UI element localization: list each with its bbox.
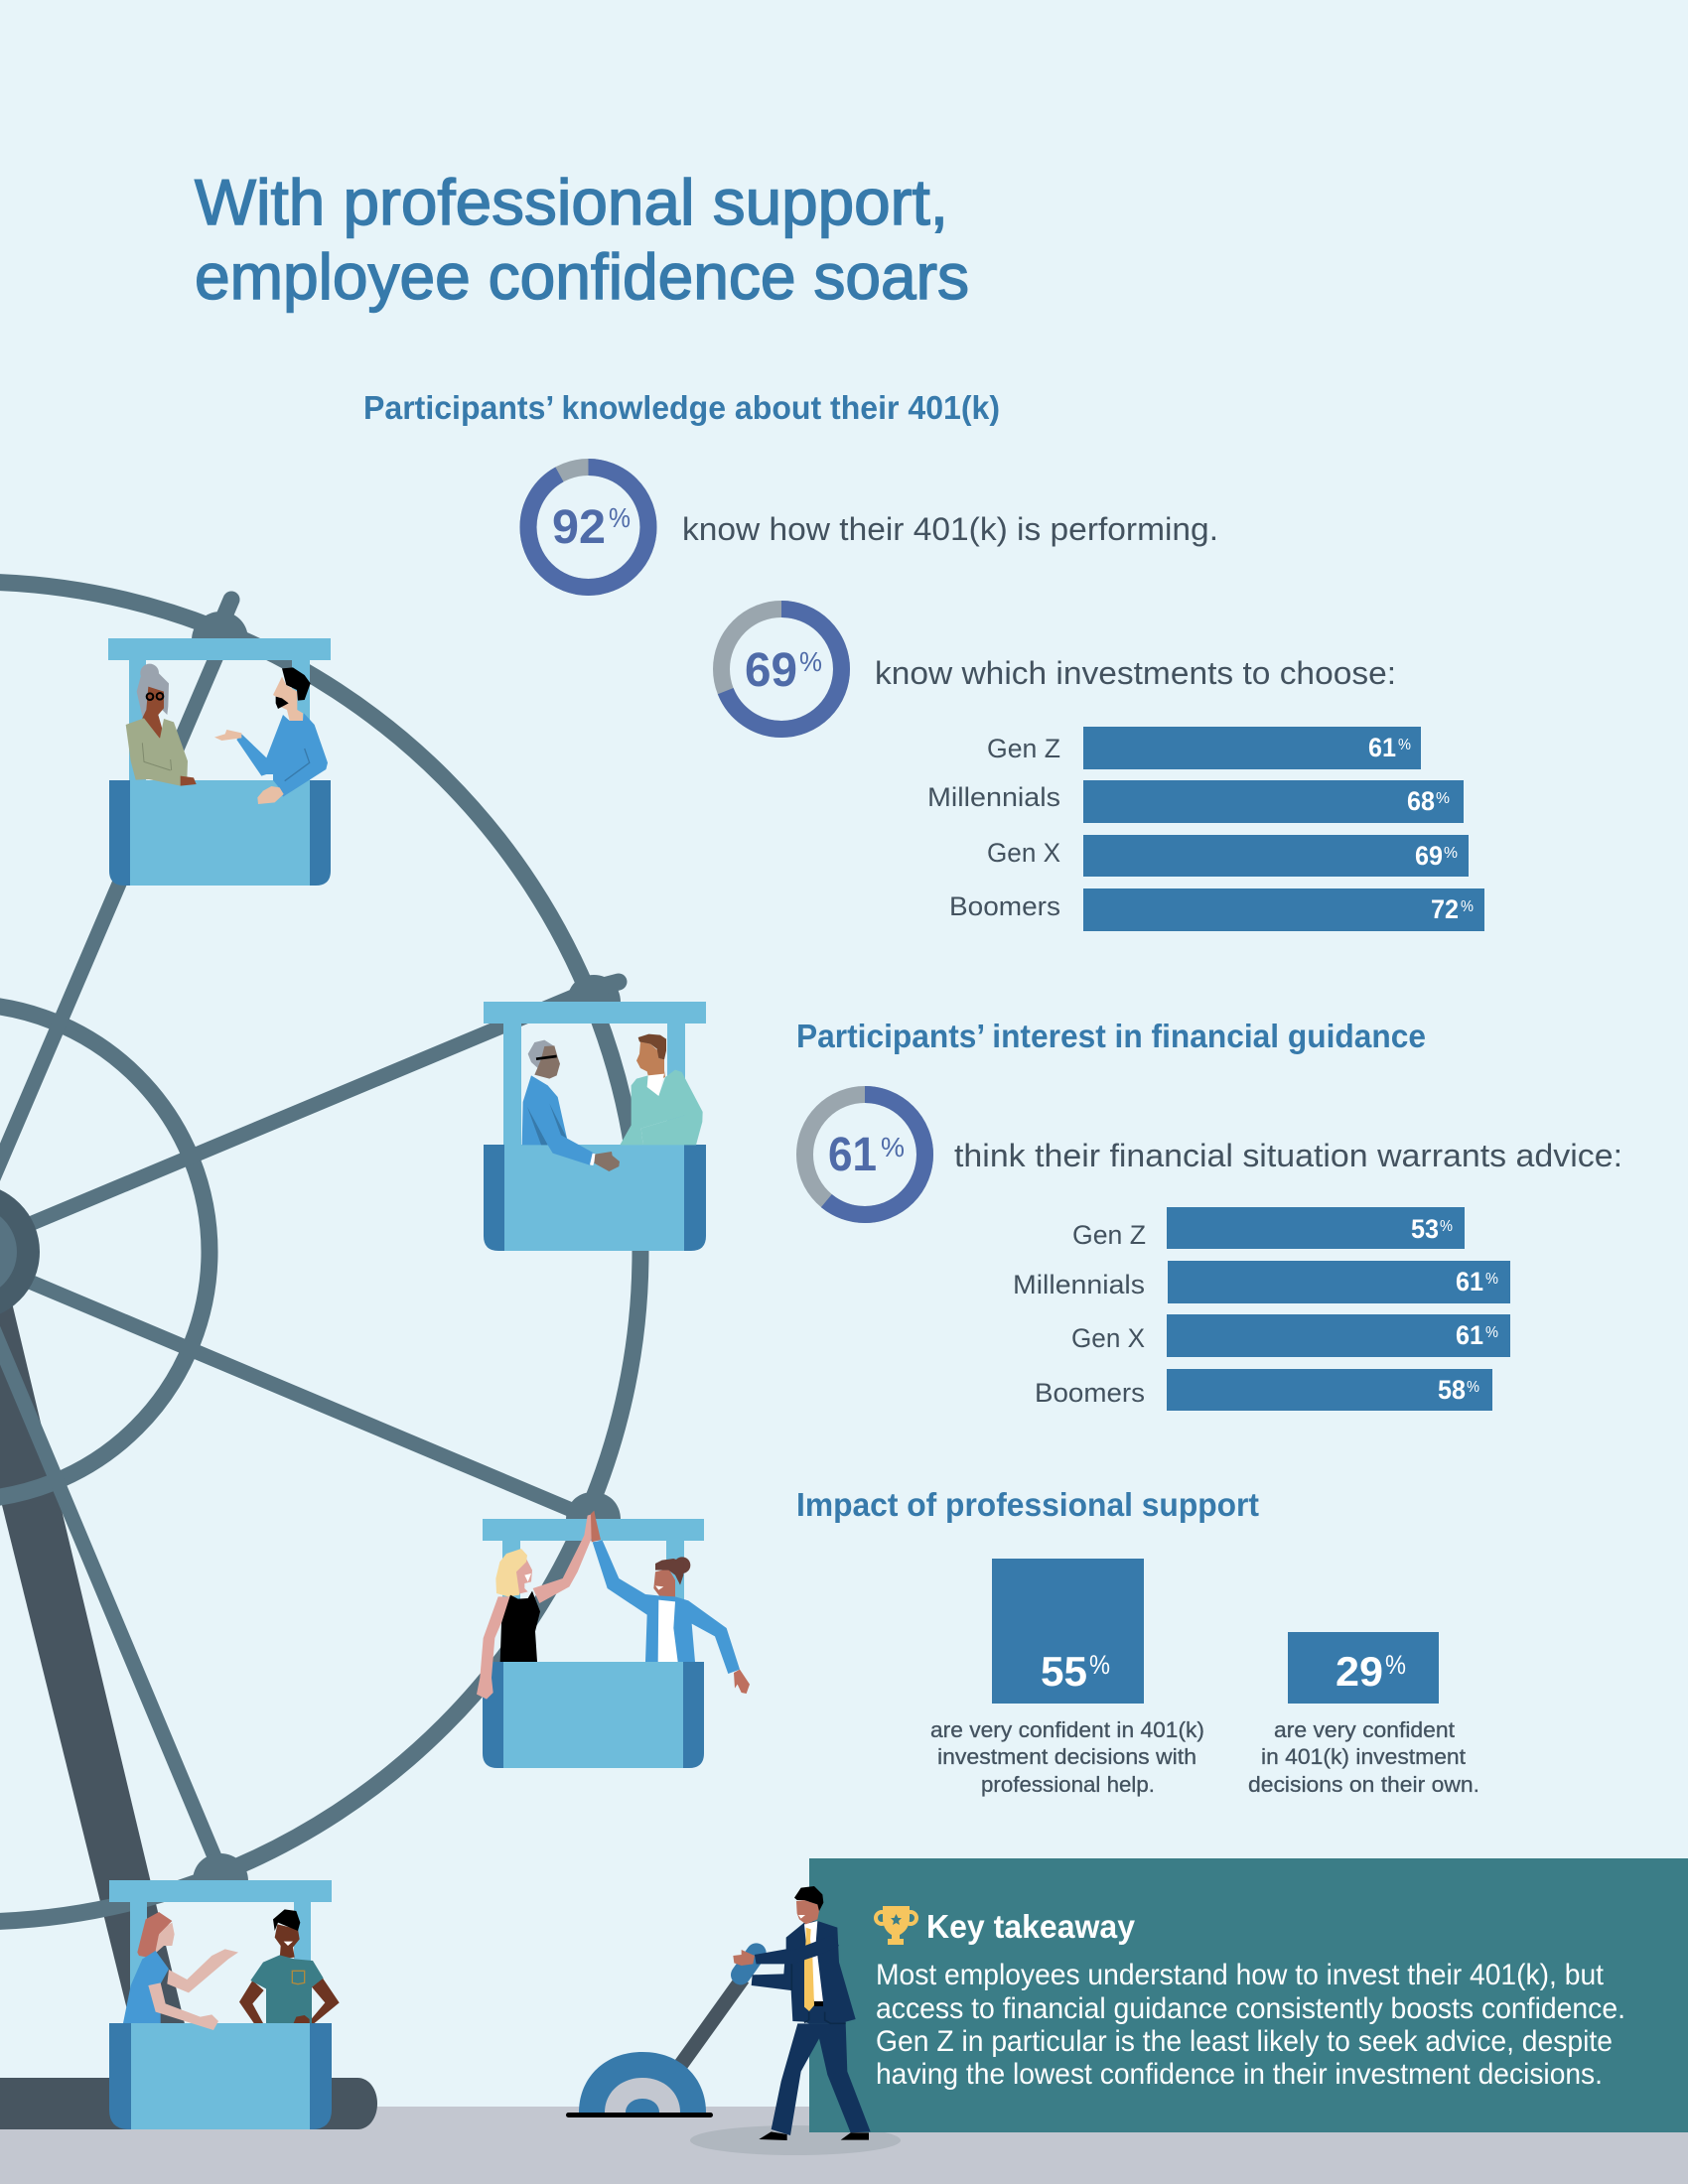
bar chart: advice by generation: Millennials — [1013, 1270, 1145, 1299]
donut: 92 percent — [528, 467, 648, 588]
title — [195, 166, 969, 313]
bar chart: investment knowledge by generation: 69 — [1415, 841, 1443, 871]
wheel spokes and rims — [0, 582, 640, 1922]
bar chart: advice by generation: 61 — [1456, 1320, 1483, 1350]
stat: 29 percent on their own: decisions on their own. — [1248, 1772, 1479, 1797]
heading: interest: Participants’ interest in financial guidance — [796, 1018, 1426, 1054]
stat: 55 percent with help: % — [1089, 1650, 1110, 1680]
illustration: crank machine and man — [566, 1886, 871, 2140]
stat: 29 percent on their own: 29 — [1336, 1648, 1383, 1695]
donut: 92 percent: 92 — [552, 501, 606, 554]
gondola frame — [108, 638, 331, 886]
donut: 61 percent: % — [881, 1132, 905, 1162]
text: 61 percent statement: think their financial situation warrants advice: — [954, 1138, 1622, 1173]
donut: 69 percent: 69 — [745, 644, 797, 697]
donut: 69 percent: % — [799, 646, 822, 677]
icon: trophy — [876, 1906, 916, 1945]
bar chart: advice by generation: Boomers — [1035, 1378, 1145, 1408]
stat: 29 percent on their own — [1248, 1632, 1479, 1797]
bar chart: advice by generation: 61 — [1456, 1267, 1483, 1297]
bar chart: investment knowledge by generation — [927, 727, 1484, 931]
gondola 1 with two people talking — [108, 638, 331, 886]
text: 69 percent statement: know which investments to choose: — [875, 655, 1396, 691]
stat: 29 percent on their own: in 401(k) investment — [1261, 1744, 1466, 1769]
bar chart: advice by generation: Gen X — [1071, 1323, 1145, 1353]
gondola mounts — [192, 600, 621, 1881]
takeaway text: Gen Z in particular is the least likely to seek advice, despite — [876, 2025, 1613, 2058]
bar chart: investment knowledge by generation: Gen X — [987, 838, 1060, 868]
stat: 55 percent with help: professional help. — [981, 1772, 1155, 1797]
people — [123, 1909, 340, 2030]
gondola frame — [483, 1519, 704, 1768]
ground — [0, 2107, 1688, 2184]
stat: 55 percent with help: investment decisions with — [937, 1744, 1196, 1769]
gondola 3 with two women high-fiving — [477, 1511, 750, 1768]
bar chart: investment knowledge by generation: Millennials — [927, 782, 1060, 812]
bar chart: advice by generation — [1013, 1207, 1510, 1411]
people — [522, 1034, 703, 1171]
donut: 92 percent: % — [609, 502, 631, 533]
shadow under man — [690, 2125, 901, 2155]
stat: 55 percent with help — [930, 1559, 1204, 1797]
bar chart: investment knowledge by generation: 61 — [1368, 733, 1396, 762]
bar chart: advice by generation: 58 — [1438, 1375, 1466, 1405]
stat: 29 percent on their own: % — [1385, 1650, 1406, 1680]
bar chart: advice by generation: % — [1485, 1324, 1498, 1341]
bar chart: advice by generation: % — [1467, 1379, 1479, 1396]
gondola frame — [484, 1002, 706, 1251]
takeaway text: Most employees understand how to invest their 401(k), but — [876, 1959, 1605, 1991]
wheel base — [0, 2078, 377, 2129]
crank wheel — [566, 2052, 713, 2117]
bar chart: investment knowledge by generation: % — [1461, 898, 1474, 915]
donut: 61 percent: 61 — [828, 1129, 877, 1181]
bar chart: investment knowledge by generation: Gen Z — [987, 734, 1060, 763]
gondola 4 with woman and man talking — [109, 1880, 340, 2129]
people — [477, 1511, 750, 1700]
stat: 55 percent with help: 55 — [1041, 1648, 1087, 1695]
bar chart: investment knowledge by generation: % — [1436, 790, 1450, 807]
people — [126, 664, 328, 804]
gondola frame — [109, 1880, 332, 2129]
bar chart: advice by generation: % — [1440, 1218, 1453, 1235]
gondola 2 with two men shaking hands — [484, 1002, 706, 1251]
bar chart: investment knowledge by generation: % — [1398, 737, 1411, 753]
bar chart: investment knowledge by generation: % — [1444, 845, 1458, 862]
takeaway heading: Key takeaway — [926, 1908, 1136, 1945]
takeaway text: access to financial guidance consistently boosts confidence. — [876, 1992, 1625, 2025]
bar chart: investment knowledge by generation: Boomers — [949, 891, 1060, 921]
illustration: ferris wheel — [0, 582, 640, 2129]
bar chart: advice by generation: Gen Z — [1072, 1220, 1146, 1250]
bar chart: investment knowledge by generation: 72 — [1431, 894, 1459, 924]
text: 92 percent statement: know how their 401(k) is performing. — [682, 511, 1218, 547]
donut: 69 percent — [721, 610, 842, 729]
stat: 55 percent with help: are very confident in 401(k) — [930, 1717, 1204, 1742]
crank lever — [677, 1979, 743, 2070]
takeaway text: having the lowest confidence in their investment decisions. — [876, 2058, 1603, 2091]
wheel hub — [0, 1183, 40, 1320]
panel: key takeaway — [809, 1858, 1688, 2132]
takeaway text — [876, 1959, 1625, 2091]
title: With professional support, — [195, 166, 948, 238]
title: employee confidence soars — [195, 240, 969, 313]
bar chart: advice by generation: 53 — [1411, 1214, 1439, 1244]
bar chart: investment knowledge by generation: 68 — [1407, 786, 1435, 816]
man turning crank — [733, 1886, 871, 2140]
wheel support leg — [0, 1253, 198, 2078]
donut: 61 percent — [804, 1094, 925, 1215]
heading: knowledge: Participants’ knowledge about their 401(k) — [363, 389, 1000, 426]
heading: impact: Impact of professional support — [796, 1486, 1259, 1523]
bar chart: advice by generation: % — [1485, 1271, 1498, 1288]
stat: 29 percent on their own: are very confident — [1274, 1717, 1455, 1742]
